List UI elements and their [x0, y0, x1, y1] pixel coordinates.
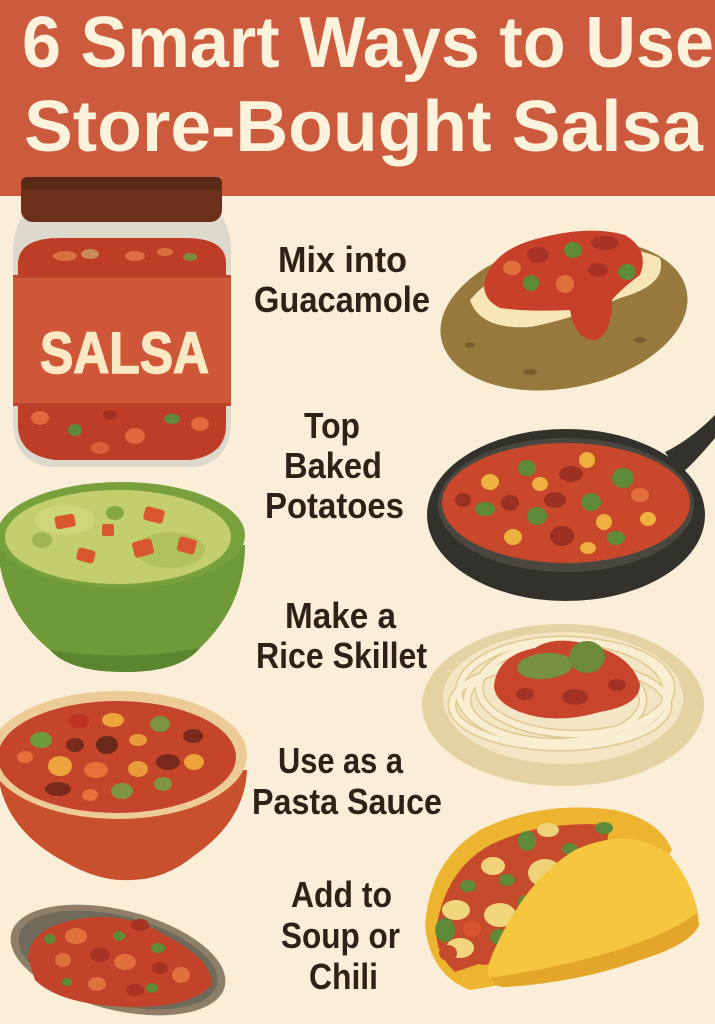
label: Make a Rice Skillet: Rice Skillet	[256, 635, 427, 676]
label: Top Baked Potatoes: Top	[304, 405, 360, 446]
icon: guacamole bowl	[0, 482, 245, 672]
label: Use as a Pasta Sauce: Pasta Sauce	[252, 781, 442, 822]
label: Add to Soup or Chili: Chili	[309, 956, 378, 997]
label: Add to Soup or Chili: Soup or	[281, 915, 400, 956]
title line 2: Store-Bought Salsa	[24, 87, 704, 167]
label: Use as a Pasta Sauce	[252, 740, 442, 822]
label: Mix into Guacamole	[254, 239, 430, 320]
label: Top Baked Potatoes	[265, 405, 404, 526]
icon: rice skillet	[427, 415, 715, 601]
icon: salsa bowl	[0, 691, 247, 880]
icon: salsa jar	[13, 177, 231, 467]
label: Mix into Guacamole: Guacamole	[254, 279, 430, 320]
title line 1: 6 Smart Ways to Use	[22, 3, 714, 83]
jar label text: SALSA	[40, 321, 209, 386]
label: Make a Rice Skillet	[256, 595, 427, 676]
label: Add to Soup or Chili: Add to	[291, 874, 392, 915]
icon: pasta plate	[422, 624, 704, 786]
icon: baked potato	[427, 219, 701, 411]
icon: taco	[425, 808, 699, 990]
icon: salsa plate	[0, 885, 237, 1024]
label: Top Baked Potatoes: Potatoes	[265, 485, 404, 526]
label: Top Baked Potatoes: Baked	[284, 445, 382, 486]
label: Make a Rice Skillet: Make a	[285, 595, 397, 636]
title banner	[0, 0, 715, 196]
label: Mix into Guacamole: Mix into	[278, 239, 407, 280]
label: Add to Soup or Chili	[281, 874, 400, 997]
label: Use as a Pasta Sauce: Use as a	[278, 740, 404, 781]
